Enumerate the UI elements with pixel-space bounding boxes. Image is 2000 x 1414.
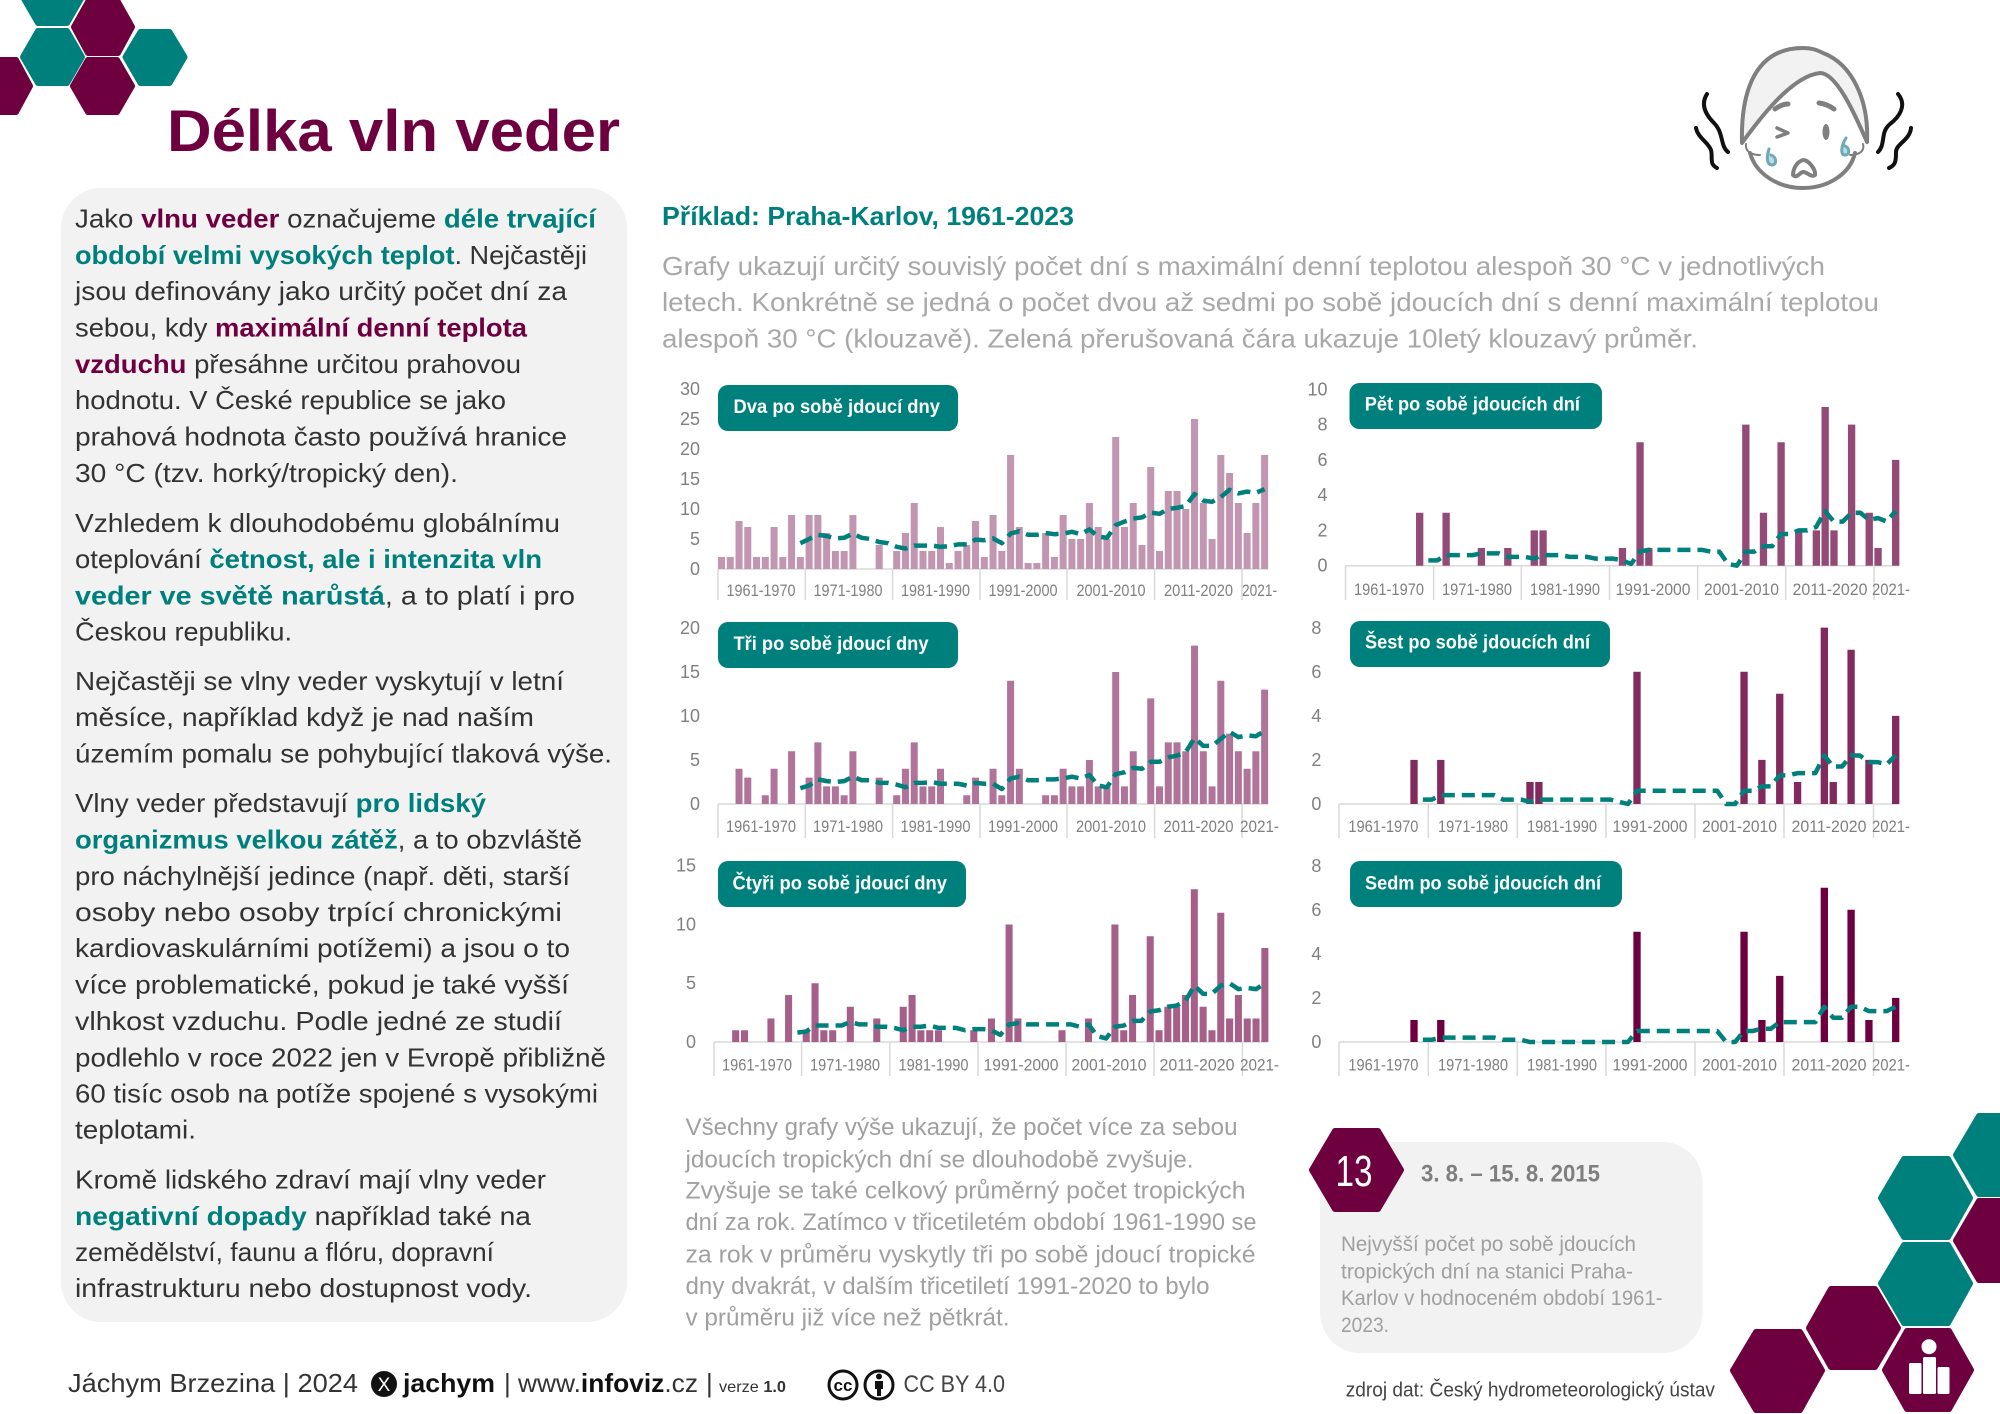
x axis with decade labels: 1981-1990 <box>898 1056 968 1074</box>
y axis labels: 8 <box>1311 856 1321 876</box>
x axis with decade labels: 2011-2020 <box>1164 581 1233 600</box>
y axis labels: 15 <box>680 662 700 682</box>
y axis labels: 10 <box>676 914 696 934</box>
x axis with decade labels <box>714 1042 1279 1076</box>
x axis with decade labels: 2011-2020 <box>1792 1056 1866 1074</box>
paragraph: occurrence: územím pomalu se pohybující tlaková výše. <box>75 738 612 768</box>
paragraph: other impacts: negativní dopady například také na <box>75 1201 532 1231</box>
y axis labels <box>1311 856 1321 1052</box>
text block: chart description: alespoň 30 °C (klouzavě). Zelená přerušovaná čára ukazuje 10letý klouzavý průměr. <box>662 324 1698 354</box>
y axis labels: 0 <box>1311 1032 1321 1052</box>
footer: author and links: jachym <box>402 1368 495 1398</box>
x axis with decade labels: 1981-1990 <box>1527 1056 1597 1074</box>
x axis with decade labels: 2021- <box>1872 1056 1910 1074</box>
x axis with decade labels <box>1346 566 1910 600</box>
text block: charts conclusion: jdoucích tropických dní se dlouhodobě zvyšuje. <box>684 1146 1194 1173</box>
paragraph: definition of heat wave: sebou, kdy maximální denní teplota <box>75 312 528 342</box>
y axis labels: 5 <box>686 973 696 993</box>
x axis with decade labels: 2011-2020 <box>1160 1056 1234 1074</box>
x axis with decade labels: 1971-1980 <box>1438 817 1508 836</box>
badge: chart title <box>718 861 966 907</box>
text block: charts conclusion: Zvyšuje se také celkový průměrný počet tropických <box>686 1178 1246 1205</box>
icon: hexagon with infographic symbol <box>1885 1331 1971 1409</box>
paragraph: other impacts <box>75 1164 546 1303</box>
paragraph: global warming: oteplování četnost, ale i intenzita vln <box>75 544 542 574</box>
moving average line <box>800 731 1265 789</box>
badge: chart title: Čtyři po sobě jdoucí dny <box>732 872 947 894</box>
y axis labels <box>1311 618 1321 814</box>
y axis labels: 6 <box>1317 450 1328 470</box>
y axis labels: 20 <box>680 439 700 459</box>
paragraph: occurrence <box>75 666 612 768</box>
y axis labels: 0 <box>686 1032 696 1052</box>
bars <box>718 419 1268 569</box>
text block: charts conclusion: Všechny grafy výše ukazují, že počet více za sebou <box>686 1114 1238 1141</box>
chart: three consecutive days <box>680 618 1279 838</box>
paragraph: health burden: Vlny veder představují pro lidský <box>75 788 487 818</box>
x axis with decade labels: 2001-2010 <box>1072 1056 1146 1074</box>
record description <box>1341 1233 1663 1337</box>
y axis labels <box>680 379 700 579</box>
paragraph: health burden: organizmus velkou zátěž , a to obzvláště <box>75 824 582 854</box>
x axis with decade labels <box>718 569 1277 600</box>
text block: chart description: Grafy ukazují určitý souvislý počet dní s maximální denní teplotou alespoň 30 °C v jednotlivých <box>662 251 1825 281</box>
x axis with decade labels <box>1339 804 1910 838</box>
x axis with decade labels: 1961-1970 <box>1354 580 1424 599</box>
x axis with decade labels: 1961-1970 <box>726 581 796 600</box>
x axis with decade labels: 1971-1980 <box>1442 580 1512 599</box>
bars <box>1410 628 1899 804</box>
paragraph: global warming: Českou republiku. <box>75 616 292 646</box>
paragraph: health burden: vlhkost vzduchu. Podle jedné ze studií <box>75 1006 563 1036</box>
heading: example station: Příklad: Praha-Karlov, 1961-2023 <box>662 201 1074 231</box>
x axis with decade labels: 1971-1980 <box>814 581 882 600</box>
paragraph: definition of heat wave: 30 °C (tzv. horký/tropický den). <box>75 458 458 488</box>
y axis labels: 4 <box>1311 706 1321 726</box>
x axis with decade labels: 1981-1990 <box>1527 817 1597 836</box>
paragraph: other impacts: Kromě lidského zdraví mají vlny veder <box>75 1164 546 1194</box>
chart: four consecutive days <box>676 856 1279 1076</box>
footer: author and links: | <box>504 1368 511 1398</box>
icon: creative commons <box>829 1371 893 1399</box>
badge: chart title <box>718 385 958 431</box>
y axis labels: 6 <box>1311 662 1321 682</box>
x axis with decade labels <box>1339 1042 1910 1076</box>
paragraph: definition of heat wave: prahová hodnota často používá hranice <box>75 422 567 452</box>
badge: chart title <box>1350 621 1610 667</box>
paragraph: definition of heat wave: období velmi vysokých teplot . Nejčastěji <box>75 240 587 270</box>
footer: author and links: CC BY 4.0 <box>904 1371 1005 1398</box>
y axis labels: 4 <box>1317 485 1328 505</box>
paragraph: definition of heat wave <box>74 204 597 488</box>
x axis with decade labels: 1981-1990 <box>1530 580 1600 599</box>
y axis labels: 15 <box>680 469 700 489</box>
x axis with decade labels: 1971-1980 <box>810 1056 880 1074</box>
badge: chart title <box>1350 861 1622 907</box>
paragraph: health burden: pro náchylnější jedince (např. děti, starší <box>75 861 571 891</box>
x axis with decade labels: 1981-1990 <box>901 581 970 600</box>
x axis with decade labels: 2021- <box>1240 1056 1279 1074</box>
badge: chart title: Šest po sobě jdoucích dní <box>1365 632 1591 654</box>
paragraph: health burden: osoby nebo osoby trpící chronickými <box>75 897 562 927</box>
x axis with decade labels: 1991-2000 <box>988 581 1058 600</box>
x axis with decade labels: 2011-2020 <box>1792 817 1866 836</box>
moving average line <box>800 489 1265 549</box>
x axis with decade labels: 1991-2000 <box>1616 580 1690 599</box>
badge: chart title <box>1350 383 1602 429</box>
x axis with decade labels: 1961-1970 <box>726 817 796 836</box>
paragraph: health burden <box>75 788 606 1144</box>
y axis labels: 8 <box>1317 415 1328 435</box>
text block: charts conclusion: za rok v průměru vyskytly tři po sobě jdoucí tropické <box>686 1241 1256 1268</box>
paragraph: definition of heat wave: Jako vlnu veder označujeme déle trvající <box>75 204 597 234</box>
hexagon with number 13: 13 <box>1336 1147 1372 1196</box>
paragraph: occurrence: Nejčastěji se vlny veder vyskytují v letní <box>75 666 565 696</box>
bars <box>1410 888 1899 1042</box>
badge: chart title: Pět po sobě jdoucích dní <box>1365 395 1581 416</box>
x axis with decade labels: 1961-1970 <box>722 1056 792 1074</box>
callout: record heat wave <box>1312 1131 1702 1353</box>
y axis labels: 8 <box>1311 618 1321 638</box>
hexagon with number 13 <box>1312 1131 1401 1209</box>
x axis with decade labels: 2001-2010 <box>1702 1056 1777 1074</box>
badge: chart title: Sedm po sobě jdoucích dní <box>1365 874 1602 894</box>
y axis labels: 20 <box>680 618 700 638</box>
x axis with decade labels: 1971-1980 <box>1438 1056 1508 1074</box>
x axis with decade labels: 2011-2020 <box>1164 817 1234 836</box>
footer: author and links: Jáchym Brzezina | 2024 <box>68 1368 358 1398</box>
y axis labels: 0 <box>690 794 700 814</box>
paragraph: global warming <box>75 508 575 646</box>
footer: author and links <box>68 1368 1005 1399</box>
text block: charts conclusion <box>684 1114 1256 1332</box>
x axis with decade labels: 2011-2020 <box>1792 580 1868 599</box>
footer: author and links: www.infoviz.cz <box>517 1368 698 1398</box>
y axis labels: 6 <box>1311 900 1321 920</box>
paragraph: health burden: podlehlo v roce 2022 jen v Evropě přibližně <box>75 1042 606 1072</box>
moving average line <box>1423 1007 1896 1042</box>
y axis labels: 0 <box>690 559 700 579</box>
icon: creative commons: cc <box>834 1376 852 1395</box>
icon: sweating face in heat <box>1696 48 1911 188</box>
chart: six consecutive days <box>1311 618 1910 838</box>
y axis labels <box>676 856 696 1052</box>
y axis labels: 10 <box>680 499 700 519</box>
x axis with decade labels: 2001-2010 <box>1704 580 1779 599</box>
panel: left intro text <box>61 188 627 1322</box>
x axis with decade labels: 2021- <box>1240 817 1279 836</box>
moving average line <box>797 983 1265 1038</box>
y axis labels: 10 <box>1307 379 1328 399</box>
icon: X logo <box>371 1371 397 1397</box>
x axis with decade labels: 2021- <box>1872 580 1910 599</box>
title: Délka vln veder <box>167 99 620 164</box>
text block: chart description <box>662 251 1879 354</box>
y axis labels <box>680 618 700 814</box>
decorative hexagons: top left <box>0 0 184 112</box>
text block: chart description: letech. Konkrétně se jedná o počet dvou až sedmi po sobě jdoucích dní s denní maximální teplotou <box>662 287 1879 317</box>
x axis with decade labels: 1991-2000 <box>1612 817 1688 836</box>
paragraph: health burden: teplotami. <box>75 1114 196 1144</box>
y axis labels: 2 <box>1311 750 1321 770</box>
x axis with decade labels: 2001-2010 <box>1076 817 1146 836</box>
paragraph: health burden: kardiovaskulárními potížemi) a jsou o to <box>75 933 570 963</box>
text block: charts conclusion: v průměru již více než pětkrát. <box>686 1305 1010 1332</box>
y axis labels: 10 <box>680 706 700 726</box>
x axis with decade labels <box>718 804 1279 838</box>
record description: Nejvyšší počet po sobě jdoucích <box>1341 1233 1636 1256</box>
paragraph: global warming: veder ve světě narůstá , a to platí i pro <box>75 580 575 610</box>
y axis labels: 5 <box>690 750 700 770</box>
y axis labels: 4 <box>1311 944 1321 964</box>
record description: Karlov v hodnoceném období 1961- <box>1341 1287 1663 1310</box>
chart: two consecutive days <box>680 379 1277 600</box>
paragraph: definition of heat wave: jsou definovány jako určitý počet dní za <box>74 276 568 306</box>
y axis labels <box>1307 379 1328 576</box>
y axis labels: 25 <box>680 409 700 429</box>
x axis with decade labels: 1971-1980 <box>813 817 883 836</box>
x axis with decade labels: 1961-1970 <box>1348 1056 1418 1074</box>
x axis with decade labels: 1991-2000 <box>984 1056 1058 1074</box>
bars <box>732 889 1268 1042</box>
paragraph: other impacts: infrastrukturu nebo dostupnost vody. <box>75 1273 532 1303</box>
x axis with decade labels: 2001-2010 <box>1076 581 1146 600</box>
paragraph: health burden: 60 tisíc osob na potíže spojené s vysokými <box>75 1078 598 1108</box>
badge: chart title: Tři po sobě jdoucí dny <box>734 634 929 655</box>
x axis with decade labels: 1961-1970 <box>1348 817 1418 836</box>
paragraph: other impacts: zemědělství, faunu a flóru, dopravní <box>75 1237 495 1267</box>
footer: author and links: verze 1.0 <box>719 1379 786 1396</box>
x axis with decade labels: 1981-1990 <box>900 817 970 836</box>
decorative hexagons: bottom right <box>1733 1116 2000 1410</box>
x axis with decade labels: 1991-2000 <box>988 817 1058 836</box>
y axis labels: 30 <box>680 379 700 399</box>
chart: seven consecutive days <box>1311 856 1910 1076</box>
badge: chart title <box>718 622 958 668</box>
y axis labels: 0 <box>1311 794 1321 814</box>
bars <box>736 646 1268 804</box>
paragraph: definition of heat wave: vzduchu přesáhne určitou prahovou <box>75 349 521 379</box>
paragraph: global warming: Vzhledem k dlouhodobému globálnímu <box>75 508 560 538</box>
x axis with decade labels: 2021- <box>1242 581 1277 600</box>
paragraph: definition of heat wave: hodnotu. V České republice se jako <box>75 385 506 415</box>
record date: 3. 8. – 15. 8. 2015 <box>1421 1160 1600 1188</box>
y axis labels: 5 <box>690 529 700 549</box>
y axis labels: 0 <box>1317 556 1328 576</box>
chart: five consecutive days <box>1307 379 1910 600</box>
moving average line <box>1428 511 1896 566</box>
icon: X logo: X <box>378 1375 391 1396</box>
paragraph: health burden: více problematické, pokud je také vyšší <box>75 970 570 1000</box>
paragraph: occurrence: měsíce, například když je nad naším <box>75 702 534 732</box>
data source: zdroj dat: Český hydrometeorologický ústav <box>1346 1379 1715 1402</box>
text block: charts conclusion: dní za rok. Zatímco v třicetiletém období 1961-1990 se <box>686 1209 1256 1236</box>
badge: chart title: Dva po sobě jdoucí dny <box>734 397 940 418</box>
y axis labels: 2 <box>1311 988 1321 1008</box>
y axis labels: 15 <box>676 856 696 876</box>
x axis with decade labels: 1991-2000 <box>1612 1056 1688 1074</box>
y axis labels: 2 <box>1317 520 1328 540</box>
moving average line <box>1423 756 1896 804</box>
text block: charts conclusion: dny dvakrát, v dalším třicetiletí 1991-2020 to bylo <box>686 1273 1210 1300</box>
bars <box>1416 407 1899 566</box>
x axis with decade labels: 2021- <box>1872 817 1910 836</box>
footer: author and links: | <box>706 1368 713 1398</box>
record description: tropických dní na stanici Praha- <box>1341 1260 1633 1283</box>
record description: 2023. <box>1341 1314 1389 1337</box>
x axis with decade labels: 2001-2010 <box>1702 817 1777 836</box>
